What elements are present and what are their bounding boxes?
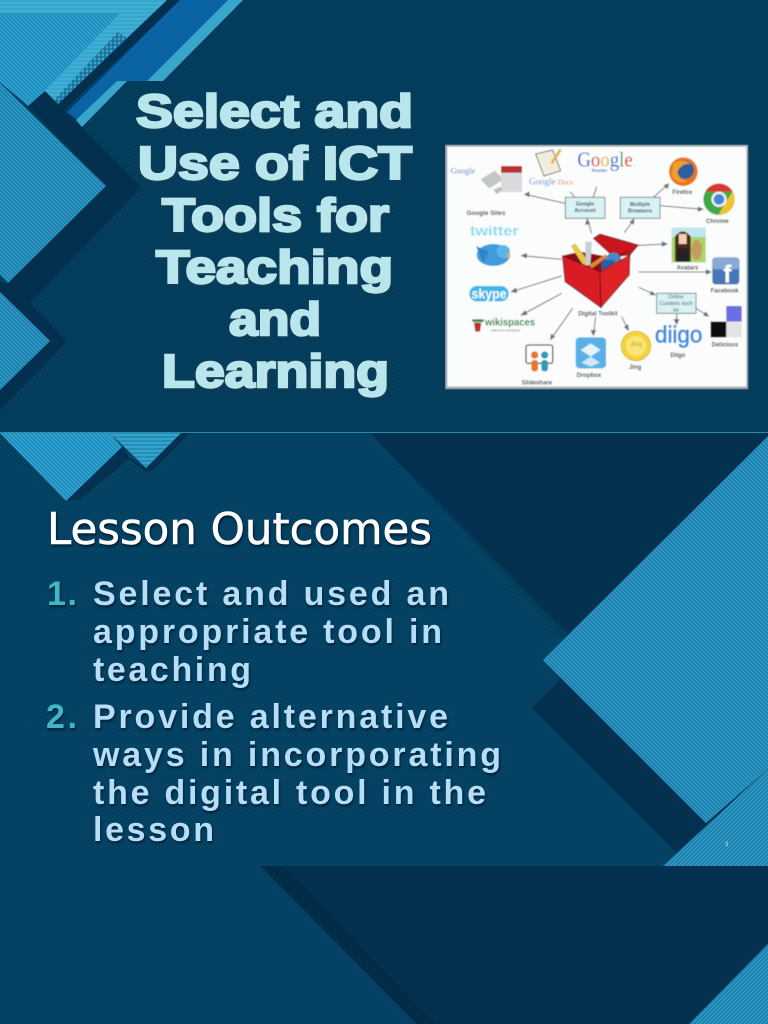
logo: wikispaces <box>472 318 535 332</box>
navy panel <box>284 866 768 1024</box>
logo: skype: skype <box>471 286 507 302</box>
box: online curators: as <box>673 307 679 313</box>
icon: dropbox <box>576 337 606 379</box>
icon: google sites <box>451 166 522 217</box>
title: Teaching <box>156 241 393 293</box>
icon: jing <box>621 331 651 371</box>
icon: avatars <box>672 228 706 271</box>
item 2: 2. <box>46 698 77 736</box>
title: Tools for <box>162 189 389 241</box>
item 2 <box>46 698 501 849</box>
box: google account: Account <box>574 208 596 214</box>
title: Select and <box>136 85 413 137</box>
icon: avatars: Avatars <box>677 265 699 271</box>
icon: toolbox <box>562 234 638 318</box>
logo: google reader: Reader <box>592 168 608 173</box>
item 2: Provide alternative <box>93 698 448 736</box>
icon: delicious: Delicious <box>712 343 739 349</box>
icon: facebook <box>711 257 739 295</box>
logo: diigo: Diigo <box>670 353 686 359</box>
slide divider line <box>0 432 768 433</box>
icon: google docs <box>529 149 573 187</box>
hatched triangle small <box>0 292 50 390</box>
icon: google docs: Google Docs <box>529 177 573 187</box>
hatched triangle large <box>0 83 106 283</box>
connector arrows <box>512 184 711 339</box>
icon: slideshare: Slideshare <box>522 380 553 386</box>
navy diagonal panel <box>370 433 768 866</box>
title <box>136 85 413 397</box>
navy chevron <box>0 91 141 410</box>
item 1: Select and used an <box>93 575 449 613</box>
logo: diigo: diigo <box>655 322 702 348</box>
icon: chrome <box>703 184 735 225</box>
digital toolkit picture panel <box>445 145 748 389</box>
icon: toolbox: Digital Toolkit <box>578 312 617 318</box>
logo: wikispaces: wikispaces <box>484 318 535 329</box>
light teal diagonal stripe <box>76 0 243 127</box>
logo: diigo <box>655 322 702 359</box>
heading: lesson outcomes: Lesson Outcomes <box>47 504 432 555</box>
icon: firefox: Firefox <box>672 190 693 196</box>
top hatched triangle right <box>110 433 181 468</box>
blue diagonal band <box>67 0 228 120</box>
box: multiple browsers: Browsers <box>628 208 652 214</box>
slide 2 background <box>0 433 768 866</box>
top-left hatched panel <box>0 0 170 107</box>
title: and <box>229 293 321 345</box>
title: Use of ICT <box>138 137 412 189</box>
item 1: 1. <box>47 575 77 613</box>
box: multiple browsers: Multiple <box>630 202 650 208</box>
item 1: appropriate tool in <box>93 613 442 651</box>
logo: wikispaces: wikis for everyone <box>491 328 520 332</box>
icon: facebook: Facebook <box>711 289 739 295</box>
slide 3 background <box>0 866 768 1024</box>
icon: dropbox: Dropbox <box>577 373 602 379</box>
top hatched triangle left <box>0 433 122 501</box>
item 1: teaching <box>93 651 251 689</box>
box: google account <box>565 197 605 218</box>
lighter diagonal panel <box>0 433 690 866</box>
item 2: lesson <box>93 811 214 849</box>
box: online curators: Online <box>668 295 684 301</box>
item 2: the digital tool in the <box>93 774 486 812</box>
icon: chrome: Chrome <box>706 219 729 225</box>
icon: jing: Jing <box>629 365 642 371</box>
title: Learning <box>162 345 389 397</box>
outcomes list <box>46 575 501 849</box>
box: google account: Google <box>576 202 594 208</box>
navy diagonal stripe <box>58 0 180 110</box>
icon: twitter bird: twitter <box>470 224 519 239</box>
navy panel shadow <box>260 866 436 1024</box>
box: multiple browsers <box>620 197 660 218</box>
slide 1 background <box>0 0 768 433</box>
box: online curators <box>657 293 696 313</box>
hatched triangle bottom right <box>689 944 768 1024</box>
hatched triangle lower right <box>663 769 768 866</box>
icon: twitter bird <box>470 224 519 266</box>
item 1 <box>47 575 449 689</box>
icon: slideshare <box>522 345 553 386</box>
icon: google sites: Google <box>451 166 475 175</box>
icon: delicious <box>711 306 742 349</box>
page number: 3 <box>725 842 729 848</box>
icon: firefox <box>669 157 698 196</box>
icon: jing: Jing <box>630 341 642 348</box>
logo: google reader: Google <box>577 150 633 172</box>
icon: facebook: f <box>723 260 732 288</box>
box: online curators: Curators such <box>659 301 693 307</box>
icon: google sites: Google Sites <box>467 210 506 217</box>
item 2: ways in incorporating <box>92 736 501 774</box>
triangle shadow <box>66 433 190 501</box>
hatched diamond right <box>543 436 768 823</box>
